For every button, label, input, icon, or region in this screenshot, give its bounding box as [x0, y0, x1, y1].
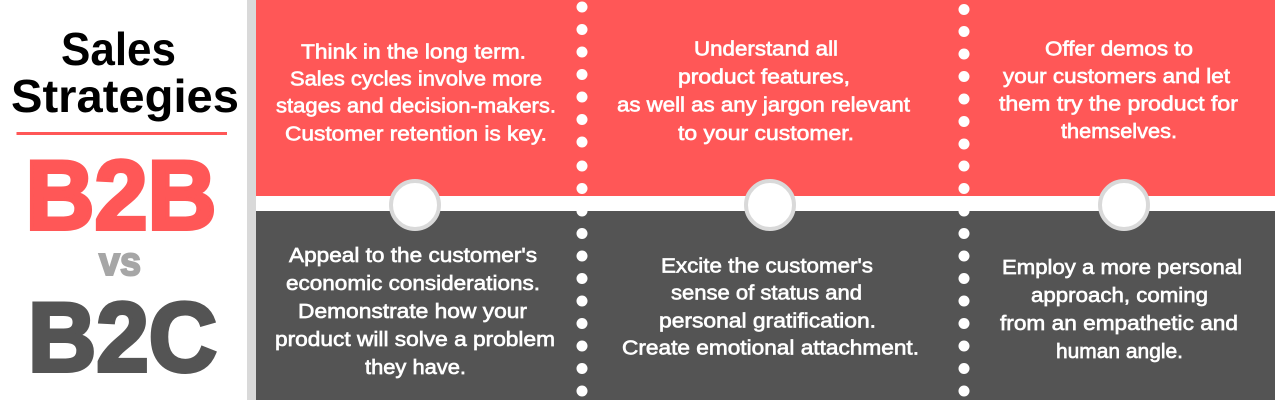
text: B2B demos — [999, 38, 1238, 143]
text: B2B product features: product features, — [678, 66, 850, 88]
panel: B2C dark band — [256, 211, 1275, 400]
text: B2B product features: as well as any jargon relevant — [617, 94, 910, 116]
text: B2B product features: Understand all — [694, 38, 838, 60]
title: Sales — [61, 23, 176, 75]
text: B2B demos: themselves. — [1061, 120, 1177, 143]
text: B2B demos: your customers and let — [1003, 65, 1230, 88]
text: B2B long term: Customer retention is key. — [285, 122, 547, 146]
text: B2C status and gratification: personal gratification. — [659, 310, 876, 332]
text: B2C personal approach — [1000, 256, 1242, 363]
heading: B2C: B2C — [28, 282, 217, 392]
text: B2B product features: to your customer. — [678, 122, 854, 145]
text: vs: vs — [99, 240, 141, 284]
text: B2C personal approach: human angle. — [1056, 340, 1183, 363]
text: B2B long term: Think in the long term. — [301, 40, 526, 64]
panel: B2B red band — [256, 0, 1275, 196]
marker: circle 2 — [746, 181, 794, 229]
text: B2B long term — [276, 40, 556, 146]
text: B2C economic considerations: Appeal to the customer's — [289, 244, 537, 267]
text: B2B demos: them try the product for — [999, 92, 1238, 116]
text: B2C economic considerations: Demonstrate how your — [298, 300, 527, 323]
text: B2C status and gratification: sense of status and — [671, 282, 862, 304]
text: B2C economic considerations: economic considerations. — [286, 272, 540, 295]
text: B2C economic considerations: they have. — [365, 356, 466, 379]
text: B2B product features — [617, 38, 910, 145]
text: B2C status and gratification: Create emotional attachment. — [622, 336, 919, 360]
dotted divider: left — [576, 2, 588, 396]
text: B2B long term: stages and decision-makers. — [276, 94, 556, 118]
text: B2C personal approach: Employ a more personal — [1002, 256, 1242, 279]
text: B2C economic considerations — [275, 244, 555, 379]
text: B2C personal approach: approach, coming — [1031, 284, 1208, 307]
heading: B2B: B2B — [26, 140, 216, 250]
title — [11, 23, 239, 122]
dotted divider: right — [958, 4, 970, 396]
panel: left title column — [0, 0, 247, 400]
text: B2C economic considerations: product will solve a problem — [275, 328, 555, 351]
text: B2C status and gratification — [622, 254, 919, 360]
marker: circle 3 — [1100, 181, 1148, 229]
text: B2B demos: Offer demos to — [1045, 38, 1193, 60]
text: B2B long term: Sales cycles involve more — [290, 68, 542, 90]
text: B2C personal approach: from an empathetic and — [1000, 312, 1238, 335]
title: Strategies — [11, 70, 239, 122]
marker: circle 1 — [391, 181, 439, 229]
text: B2C status and gratification: Excite the customer's — [661, 254, 873, 278]
